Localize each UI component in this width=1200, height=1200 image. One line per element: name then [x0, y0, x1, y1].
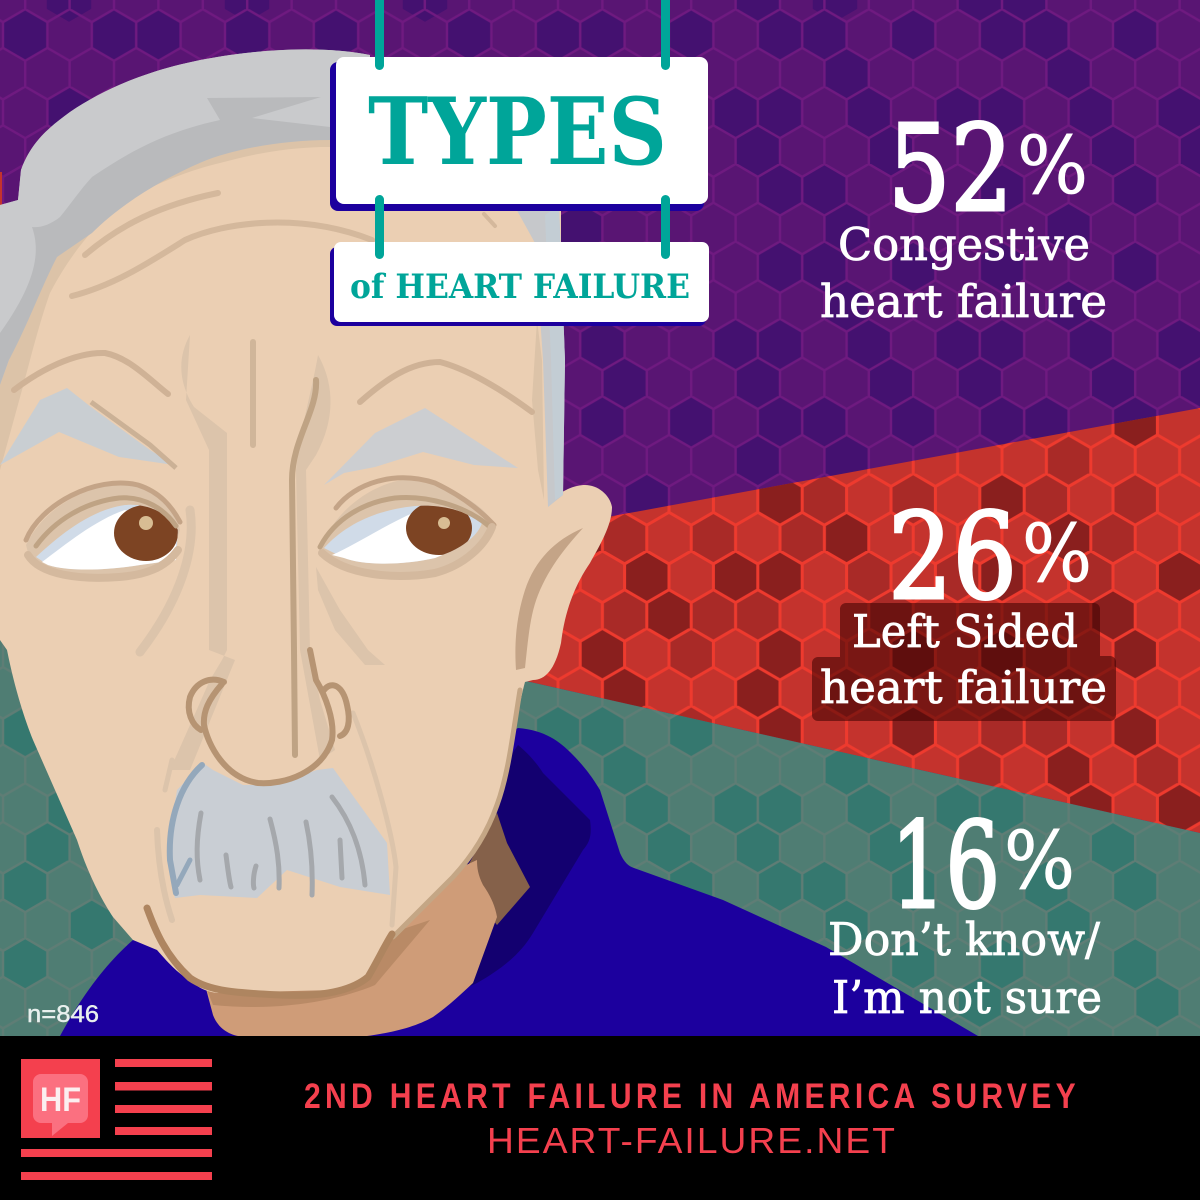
sign straps [375, 0, 670, 259]
left eye [26, 483, 180, 578]
right eye [320, 478, 494, 578]
stat: 52% congestive heart failure: heart failure [820, 275, 1107, 328]
chin shadow [205, 920, 430, 1007]
hair right side [514, 205, 565, 507]
stat: 26% left sided heart failure: Left Sided [852, 605, 1078, 658]
stat: 16% don't know / not sure: I’m not sure [832, 971, 1102, 1024]
jaw lines [147, 690, 520, 995]
panel: red background (left sided) [528, 408, 1200, 833]
nose outline [189, 650, 349, 783]
sample size note: n=846 [27, 1001, 99, 1028]
hair dark [0, 49, 370, 385]
right brow [324, 408, 518, 485]
stat: 52% congestive heart failure: Congestive [838, 218, 1090, 271]
nose bridge shading [170, 335, 235, 770]
sweater shadow [420, 745, 591, 1000]
stat: 26% left sided heart failure [820, 489, 1107, 714]
moustache [167, 763, 390, 898]
stat: 26% left sided heart failure: 26 [888, 489, 1017, 627]
panel: teal background (don't know) [0, 640, 1200, 1036]
stat: 52% congestive heart failure [820, 101, 1107, 328]
stat: 16% don't know / not sure: Don’t know/ [828, 913, 1101, 966]
left brow [0, 388, 174, 465]
logo: HF flag: HF [40, 1081, 81, 1119]
head skin [0, 120, 612, 993]
stat: 16% don't know / not sure: 16 [891, 798, 1000, 936]
sweater [60, 728, 978, 1036]
stat: 16% don't know / not sure: % [1004, 814, 1075, 907]
logo: HF flag [21, 1059, 212, 1180]
under-eye creases [140, 510, 396, 925]
stat: 26% left sided heart failure: % [1022, 507, 1092, 600]
stat: 16% don't know / not sure [828, 798, 1102, 1024]
sign: TYPES: TYPES [368, 77, 667, 186]
stat: 52% congestive heart failure: 52 [888, 101, 1013, 239]
sign: of HEART FAILURE [330, 242, 709, 326]
sign: of HEART FAILURE: of HEART FAILURE [350, 267, 690, 307]
neck [205, 860, 497, 1036]
illustration: man with grey hair and moustache [0, 49, 978, 1036]
moustache strands [170, 765, 365, 895]
red sliver at left edge [0, 172, 2, 206]
ear inner fold [515, 528, 583, 670]
icon: speech bubble [33, 1074, 88, 1136]
footer website: HEART-FAILURE.NET [487, 1120, 897, 1161]
hairline band [0, 130, 380, 470]
stat: 52% congestive heart failure: % [1017, 119, 1088, 212]
stat: 26% left sided heart failure: heart failure [820, 661, 1107, 714]
hair light [0, 49, 370, 333]
nose centre lines [253, 342, 316, 755]
footer survey title: 2ND HEART FAILURE IN AMERICA SURVEY [304, 1077, 1080, 1116]
label backdrop: left sided [812, 603, 1116, 721]
neck shadow [460, 813, 530, 925]
sign: TYPES [330, 57, 708, 211]
footer bar [0, 1036, 1200, 1200]
forehead wrinkles [14, 193, 532, 412]
